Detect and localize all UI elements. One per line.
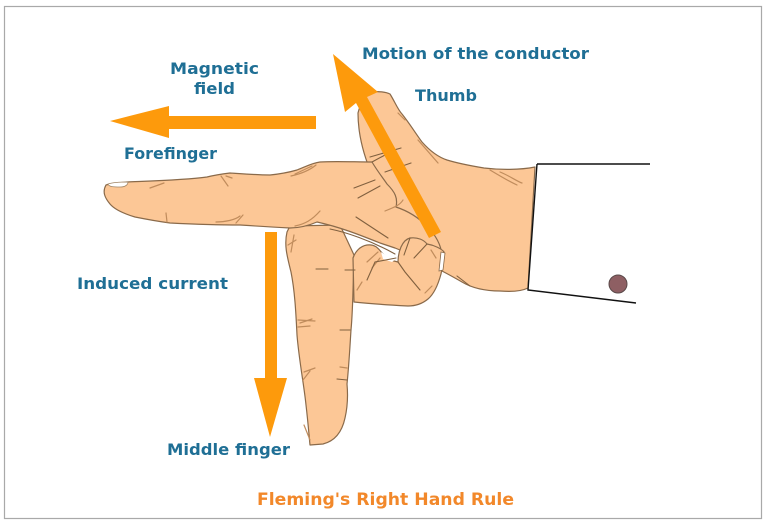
arrow: magnetic field xyxy=(110,106,316,138)
outline details xyxy=(316,148,470,380)
label: middle finger: Middle finger xyxy=(167,440,290,459)
shirt cuff xyxy=(528,164,650,303)
illustration: right hand xyxy=(104,92,535,445)
label: induced current: Induced current xyxy=(77,274,228,293)
label: forefinger: Forefinger xyxy=(124,144,217,163)
hand back and thumb xyxy=(358,92,535,291)
label: magnetic field: Magnetic xyxy=(170,59,259,78)
cuff button xyxy=(609,275,627,293)
arrow: motion of the conductor xyxy=(333,54,441,238)
nail: forefinger xyxy=(108,182,128,187)
forefinger and palm xyxy=(104,162,442,262)
title: Fleming's Right Hand Rule xyxy=(257,490,514,510)
label: magnetic field xyxy=(170,59,259,98)
middle finger xyxy=(286,225,354,445)
folded fingers xyxy=(353,238,444,306)
label: motion of the conductor: Motion of the conductor xyxy=(362,44,589,63)
label: thumb: Thumb xyxy=(415,86,477,105)
nail: folded finger xyxy=(439,252,445,271)
arrow: induced current xyxy=(254,232,287,437)
label: magnetic field: field xyxy=(194,79,235,98)
knuckle creases xyxy=(150,113,522,440)
